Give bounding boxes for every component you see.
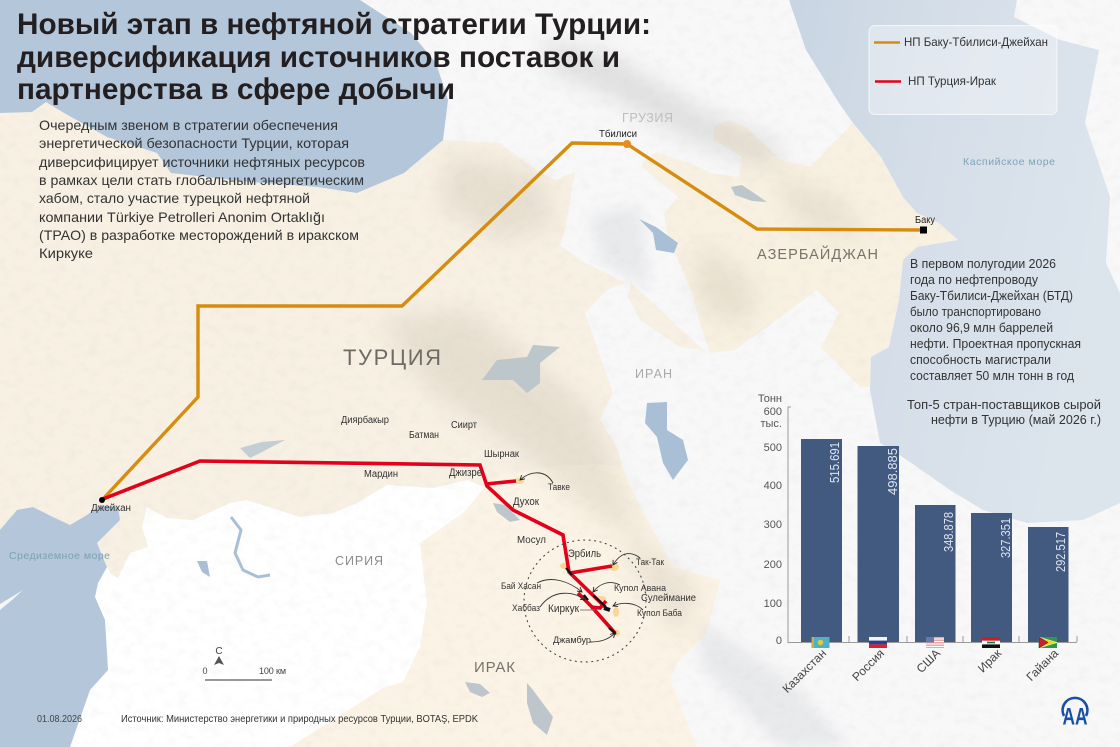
city labels: Духок	[513, 496, 539, 508]
flag: Guyana	[1039, 637, 1057, 648]
y axis labels: 0	[776, 635, 782, 647]
Turkey	[0, 102, 625, 578]
chart title: Топ-5 стран-поставщиков сырой	[907, 397, 1101, 412]
country axis labels: Казахстан	[780, 646, 829, 696]
city labels: Шырнак	[484, 449, 520, 460]
city labels: Джейхан	[91, 503, 131, 514]
black field segments	[566, 568, 616, 634]
BTC info text: года по нефтепроводу	[910, 273, 1039, 287]
country labels: СИРИЯ	[335, 554, 383, 568]
north arrow and scale	[202, 646, 286, 680]
pipeline: Baku-Tbilisi-Ceyhan	[103, 140, 927, 499]
source: Источник: Министерство энергетики и природных ресурсов Турции, BOTAŞ, EPDK	[121, 713, 478, 725]
legend item: BTC pipeline: НП Баку-Тбилиси-Джейхан	[904, 35, 1048, 49]
Ceyhan marker	[99, 497, 105, 503]
axes	[788, 407, 1077, 642]
city labels: Батман	[409, 430, 439, 441]
Nakhchivan	[628, 283, 703, 350]
city labels: Хаббаз	[512, 603, 540, 613]
bar values: 348.878	[942, 512, 956, 552]
city labels: Баку	[915, 215, 935, 226]
bar values: 498.885	[886, 448, 900, 495]
country axis labels: Ирак	[975, 646, 1005, 675]
field arrows	[520, 473, 643, 642]
AA logo: AA	[1062, 704, 1088, 730]
city labels: Так-Так	[636, 557, 664, 567]
country axis labels	[780, 646, 1061, 696]
Baku marker	[920, 226, 927, 234]
country axis labels: США	[914, 646, 943, 676]
country labels: ИРАН	[635, 367, 672, 381]
city labels: Диярбакыр	[341, 414, 389, 426]
city labels: Киркук	[548, 603, 579, 615]
bar values: 327.351	[999, 518, 1013, 558]
dotted Kirkuk circle	[524, 540, 646, 662]
y axis labels: 400	[764, 480, 782, 492]
intro text: (TPAO) в разработке месторождений в иракском	[39, 227, 359, 243]
Black Sea	[0, 0, 448, 193]
city labels: Джизре	[449, 467, 482, 479]
flag: Russia	[869, 637, 887, 648]
flag: USA	[926, 637, 944, 648]
title	[17, 8, 651, 106]
flag: Iraq	[982, 637, 1000, 648]
terrain shading	[540, 40, 790, 165]
country axis labels: Россия	[849, 646, 887, 684]
pipeline: Turkey-Iraq	[103, 461, 615, 633]
intro text: компании Türkiye Petrolleri Anonim Ortaklığı	[39, 209, 325, 225]
BTC info text: Баку-Тбилиси-Джейхан (БТД)	[910, 289, 1073, 303]
Mediterranean Sea	[0, 505, 120, 747]
country labels: ТУРЦИЯ	[343, 345, 441, 370]
legend	[869, 26, 1057, 114]
north arrow and scale: 100 км	[259, 666, 286, 676]
flag: Kazakhstan	[812, 637, 830, 648]
Tbilisi marker	[623, 140, 631, 148]
intro text: Киркуке	[39, 245, 93, 261]
bar values	[828, 442, 1068, 572]
title: диверсификация источников поставок и	[17, 41, 620, 74]
country labels: Каспийское море	[963, 156, 1055, 168]
country axis labels: Гайана	[1024, 646, 1061, 684]
city labels: Тавке	[548, 482, 570, 492]
Caspian Sea	[789, 0, 1120, 523]
city labels: Тбилиси	[599, 128, 637, 140]
intro text	[39, 117, 365, 261]
BTC info text: В первом полугодии 2026	[910, 257, 1056, 271]
intro text: хабом, стало участие турецкой нефтяной	[39, 190, 310, 206]
intro text: энергетической безопасности Турции, которая	[39, 135, 349, 151]
city labels: Сулеймание	[641, 592, 696, 604]
bar chart	[758, 393, 1077, 696]
city labels: Мосул	[517, 534, 546, 546]
north arrow and scale: С	[215, 646, 223, 657]
intro text: Очередным звеном в стратегии обеспечения	[39, 117, 338, 133]
country labels: Средиземное море	[9, 550, 110, 562]
bar values: 292.517	[1054, 532, 1068, 572]
city labels: Мардин	[364, 469, 398, 480]
country labels: АЗЕРБАЙДЖАН	[757, 245, 878, 263]
y axis labels: 200	[764, 559, 782, 571]
intro text: диверсифицирует источники нефтяных ресурсов	[39, 154, 365, 170]
y axis labels: 600	[764, 406, 782, 418]
intro text: в рамках цели стать глобальным энергетическим	[39, 172, 364, 188]
north arrow and scale: 0	[202, 666, 208, 676]
legend item: Turkey-Iraq pipeline: НП Турция-Ирак	[908, 74, 997, 88]
y axis labels: тыс.	[760, 418, 782, 430]
bar values: 515.691	[828, 442, 842, 483]
city labels: Купол Авана	[614, 583, 666, 593]
city labels: Сиирт	[451, 420, 477, 431]
y axis labels: 500	[764, 442, 782, 454]
city labels	[91, 128, 935, 645]
country labels: ИРАК	[474, 659, 515, 676]
title: партнерства в сфере добычи	[17, 73, 455, 106]
country labels	[9, 111, 1055, 676]
Syria	[70, 480, 485, 747]
y axis labels: Тонн	[758, 393, 782, 405]
country labels: ГРУЗИЯ	[622, 111, 673, 125]
BTC info text: около 96,9 млн баррелей	[910, 321, 1053, 335]
chart title	[907, 397, 1101, 427]
chart title: нефти в Турцию (май 2026 г.)	[931, 412, 1101, 427]
city labels: Бай Хасан	[501, 581, 541, 591]
city labels: Купол Баба	[637, 608, 682, 618]
date: 01.08.2026	[37, 714, 82, 725]
lakes and rivers	[482, 345, 560, 393]
BTC info text: было транспортировано	[910, 305, 1041, 319]
Iraq	[290, 465, 720, 747]
title: Новый этап в нефтяной стратегии Турции:	[17, 8, 651, 41]
y axis labels	[758, 393, 782, 647]
BTC info text	[910, 257, 1081, 383]
BTC info text: нефти. Проектная пропускная	[910, 337, 1081, 351]
BTC info text: способность магистрали	[910, 353, 1051, 367]
y axis labels: 100	[764, 598, 782, 610]
Azerbaijan	[642, 120, 958, 387]
city labels: Джамбур	[553, 635, 591, 645]
bars	[801, 439, 1068, 642]
oil fields glow	[514, 478, 620, 636]
AA logo	[1062, 698, 1088, 730]
BTC info text: составляет 50 млн тонн в год	[910, 369, 1075, 383]
city labels: Эрбиль	[568, 548, 601, 560]
y axis labels: 300	[764, 519, 782, 531]
